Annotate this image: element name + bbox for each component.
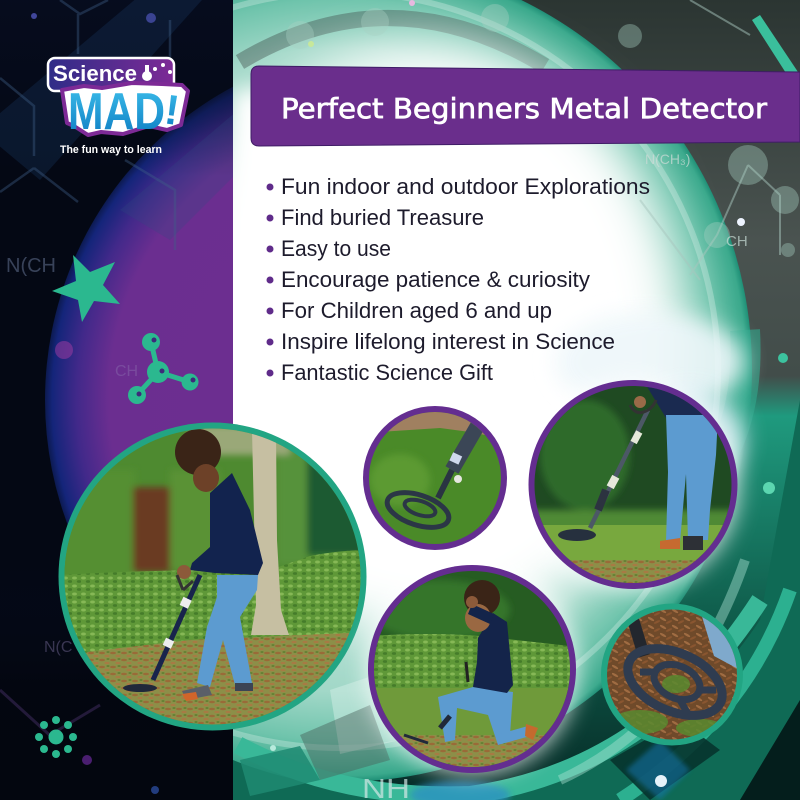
bullet list — [266, 174, 650, 385]
panel: right background — [233, 0, 800, 800]
photo figure: kneeling child — [404, 580, 538, 745]
bullet list: Fun indoor and outdoor Explorations — [281, 174, 650, 199]
bullet list: Find buried Treasure — [281, 205, 484, 230]
logo: science plate: Science — [53, 61, 137, 86]
icon: green star — [52, 255, 120, 322]
photo: child kneeling and cheering — [365, 565, 580, 778]
photo: child walking with detector — [58, 420, 370, 742]
photo: detector coil on grass — [360, 405, 510, 555]
bullet list: Inspire lifelong interest in Science — [281, 329, 615, 354]
photo: coil close-up on leaves — [600, 604, 745, 746]
photo hedge — [60, 550, 370, 653]
photo detector — [123, 575, 200, 692]
photo ground — [85, 632, 350, 724]
panel: left background: CH — [115, 363, 138, 380]
logo: Science Mad — [48, 58, 188, 156]
logo: tagline: The fun way to learn — [60, 144, 162, 156]
bullet list: For Children aged 6 and up — [281, 298, 552, 323]
bullet list: Easy to use — [281, 236, 391, 261]
icon: molecule — [128, 333, 198, 404]
icon: dot cluster — [35, 716, 77, 758]
background molecule top right — [752, 15, 798, 72]
photo figure: child — [175, 429, 263, 701]
lower green bands — [233, 400, 800, 800]
heading: Perfect Beginners Metal Detector — [281, 92, 768, 125]
glow behind right photos — [366, 379, 739, 775]
logo: MAD lettering: ! — [162, 86, 182, 134]
panel: left background — [0, 0, 233, 800]
title banner — [251, 66, 800, 146]
photo tree trunk — [251, 430, 289, 635]
bullet list: Fantastic Science Gift — [281, 360, 493, 385]
panel: left background: N(CH — [6, 255, 56, 277]
panel: left background: N(C — [44, 639, 72, 656]
photo: detector and legs — [528, 380, 740, 590]
bullet list: Encourage patience & curiosity — [281, 267, 590, 292]
logo: MAD lettering: MAD — [68, 83, 165, 141]
panel: right background: N(CH₃) — [645, 151, 690, 167]
panel: right background: CH — [726, 233, 748, 250]
